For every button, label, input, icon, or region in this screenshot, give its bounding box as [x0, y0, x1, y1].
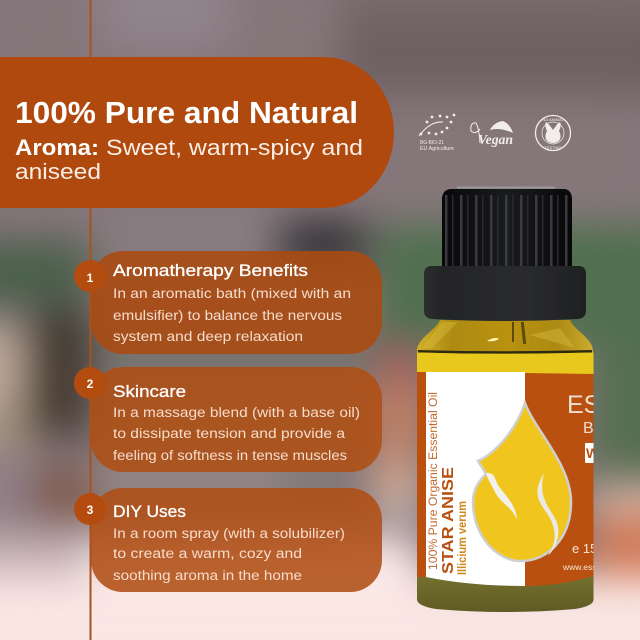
- brand text on label, cut by image edge: e 15: [572, 541, 597, 556]
- cap collar: [424, 266, 586, 321]
- card body text: feeling of softness in tense muscles: [113, 448, 347, 463]
- label side text: Illicium verum: [455, 501, 469, 575]
- heading: 100% Pure and Natural: 100% Pure and Natural: [15, 96, 358, 130]
- icon: vegan leaf: [471, 121, 513, 148]
- card body text: to dissipate tension and provide a: [113, 426, 346, 441]
- panel: skincare: [74, 367, 382, 472]
- label side text: STAR ANISE: [440, 467, 457, 574]
- icon: no animal testing: TESTING: [544, 145, 562, 150]
- timeline vertical line: [90, 0, 92, 640]
- card body text: In an aromatic bath (mixed with an: [113, 286, 351, 301]
- panel: header banner: [0, 57, 394, 208]
- card body text: emulsifier) to balance the nervous: [113, 308, 342, 323]
- card body text: system and deep relaxation: [113, 329, 303, 344]
- card body text: [113, 286, 351, 344]
- step badge 2: [74, 367, 106, 399]
- brand text on label, cut by image edge: www.ess: [562, 562, 597, 572]
- aroma description line 1: Sweet, warm-spicy and: [106, 135, 363, 160]
- neck reflections: [422, 322, 575, 348]
- step badge 1: 1: [87, 271, 94, 285]
- icon: no animal testing: [536, 116, 570, 150]
- bottle base: [417, 572, 594, 612]
- card body text: In a room spray (with a solubilizer): [113, 526, 345, 541]
- brand text on label, cut by image edge: BIO: [583, 420, 611, 437]
- label orange area: [525, 373, 594, 586]
- label left strip: [417, 372, 427, 577]
- step badge 3: 3: [87, 503, 94, 517]
- icon: EU organic leaf: [419, 114, 455, 152]
- card heading: Aromatherapy Benefits: [113, 261, 308, 280]
- cap ribbed: [442, 186, 572, 266]
- card shape: [91, 367, 382, 472]
- step badge 1: [74, 260, 106, 292]
- oil band: [417, 352, 594, 374]
- step badge 3: [74, 493, 106, 525]
- card shape: [91, 251, 382, 354]
- card shape: [91, 488, 382, 592]
- label white area: [426, 372, 525, 586]
- brand text on label, cut by image edge: ESS: [567, 391, 617, 419]
- panel: aromatherapy benefits: [74, 251, 382, 354]
- oil drop logo: [473, 403, 571, 561]
- aroma label: Aroma:: [15, 135, 99, 160]
- icon: vegan leaf: Vegan: [478, 133, 513, 148]
- brand text on label, cut by image edge: W: [586, 445, 600, 461]
- panel: DIY uses: [74, 488, 382, 592]
- card body text: to create a warm, cozy and: [113, 546, 302, 561]
- card body text: [113, 405, 360, 463]
- banner shape: [0, 57, 394, 208]
- step badge 2: 2: [87, 377, 94, 391]
- oil line: [418, 350, 592, 354]
- card body text: soothing aroma in the home: [113, 568, 302, 583]
- brand text on label, cut by image edge: [563, 395, 594, 570]
- card body text: In a massage blend (with a base oil): [113, 405, 360, 420]
- card heading: Skincare: [113, 382, 186, 401]
- label side text: 100% Pure Organic Essential Oil: [428, 392, 440, 570]
- bottle glass neck: [417, 320, 593, 372]
- product: essential oil bottle: [417, 186, 594, 612]
- aroma description line 2: aniseed: [15, 159, 101, 184]
- icon: EU organic leaf: EU Agriculture: [420, 146, 454, 152]
- icon: EU organic leaf: BG-BIO-21: [420, 140, 444, 146]
- label side text: [428, 392, 469, 575]
- card heading: DIY Uses: [113, 502, 186, 521]
- card body text: [113, 526, 345, 583]
- icon: no animal testing: NO ANIMAL: [542, 117, 565, 122]
